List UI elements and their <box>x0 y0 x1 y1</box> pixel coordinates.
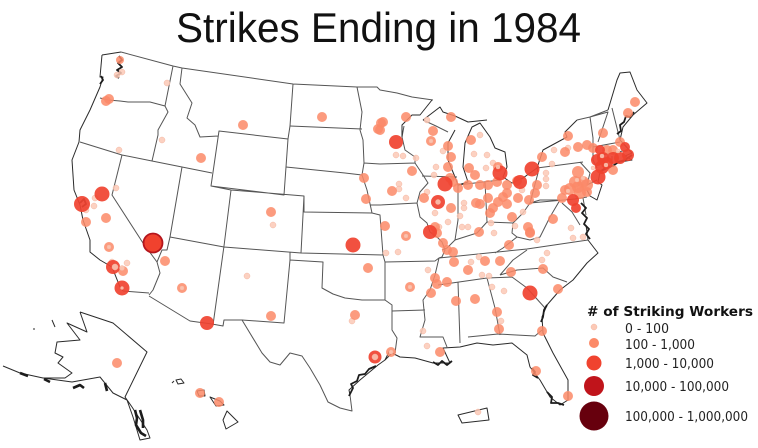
legend item: 0-100 <box>591 322 669 337</box>
strike points: 1,000-10,000 workers <box>74 135 634 364</box>
legend item: 100-1,000 <box>589 338 695 353</box>
strike point inner highlights <box>107 139 620 360</box>
map: United States state outlines <box>72 52 647 411</box>
strike point: largest ring, Nevada <box>144 234 162 252</box>
legend <box>580 305 753 430</box>
Alaska panhandle islands <box>20 373 146 436</box>
legend heading: # of Striking Workers <box>587 305 753 320</box>
coastlines <box>72 52 647 360</box>
strike points: 100-1,000 workers <box>81 56 640 407</box>
legend item: 100,000-1,000,000 <box>580 402 748 430</box>
legend item: 1,000-10,000 <box>586 356 714 372</box>
legend item: 100-1,000: 100 - 1,000 <box>625 338 695 353</box>
map: Hawaii outline <box>172 379 238 429</box>
legend item: 0-100: 0 - 100 <box>625 322 669 337</box>
legend item: 10,000-100,000 <box>584 376 729 396</box>
title: Strikes Ending in 1984 <box>176 4 581 51</box>
legend item: 10,000-100,000: 10,000 - 100,000 <box>625 380 729 395</box>
legend item: 100,000-1,000,000: 100,000 - 1,000,000 <box>625 410 748 425</box>
map: Puerto Rico outline <box>458 408 489 423</box>
coast detail: dense inlets <box>80 56 634 405</box>
strike points: 0-100 workers <box>83 69 586 415</box>
legend item: 1,000-10,000: 1,000 - 10,000 <box>625 357 714 372</box>
map: Alaska outline <box>3 312 150 440</box>
